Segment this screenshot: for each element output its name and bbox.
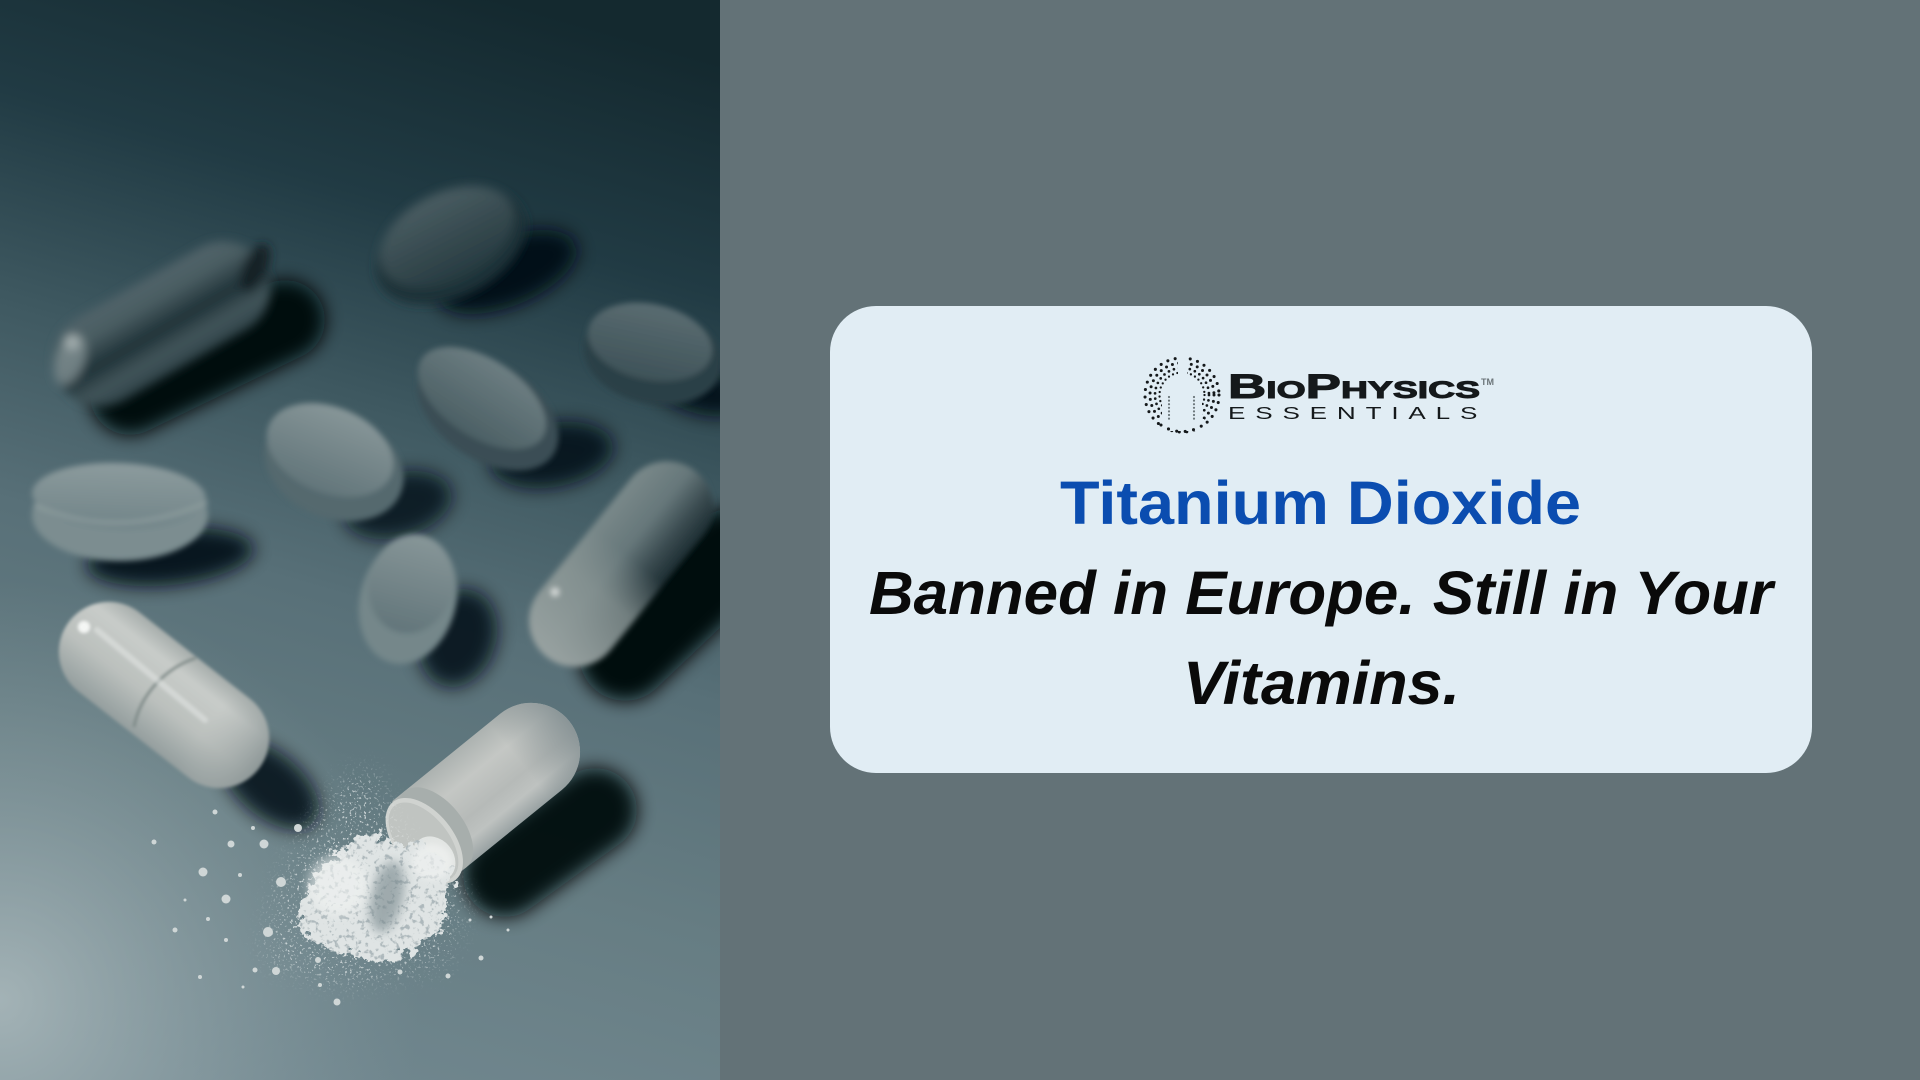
subheading — [869, 559, 1776, 717]
capsule: dark upper left — [50, 238, 276, 411]
tablet: top — [375, 182, 526, 307]
capsule: white closed — [57, 600, 271, 790]
logo trademark: TM — [1481, 377, 1494, 387]
tablet: center upper — [416, 344, 561, 473]
powder dust halo — [265, 770, 465, 985]
logo icon: dotted circle with figure — [1145, 358, 1219, 432]
card: title panel — [830, 306, 1812, 773]
tablet: lower center — [357, 531, 461, 666]
subheading: Vitamins. — [1183, 649, 1460, 717]
heading: Titanium Dioxide — [1060, 469, 1581, 537]
logo tagline: ESSENTIALS — [1228, 403, 1477, 423]
logo: BioPhysics Essentials — [1145, 358, 1494, 432]
logo wordmark: B IO P HYSICS — [1228, 368, 1480, 406]
capsule: right — [526, 458, 712, 670]
capsule: open with powder — [386, 702, 580, 884]
tablet: left — [31, 460, 208, 561]
photo panel: pills on a surface — [0, 0, 750, 1080]
tablet: center — [264, 400, 406, 524]
powder particles — [152, 810, 510, 1006]
subheading: Banned in Europe. Still in Your — [869, 559, 1776, 627]
tablet: right — [586, 300, 720, 406]
powder pile — [297, 834, 452, 959]
shadows under pills — [84, 213, 750, 875]
